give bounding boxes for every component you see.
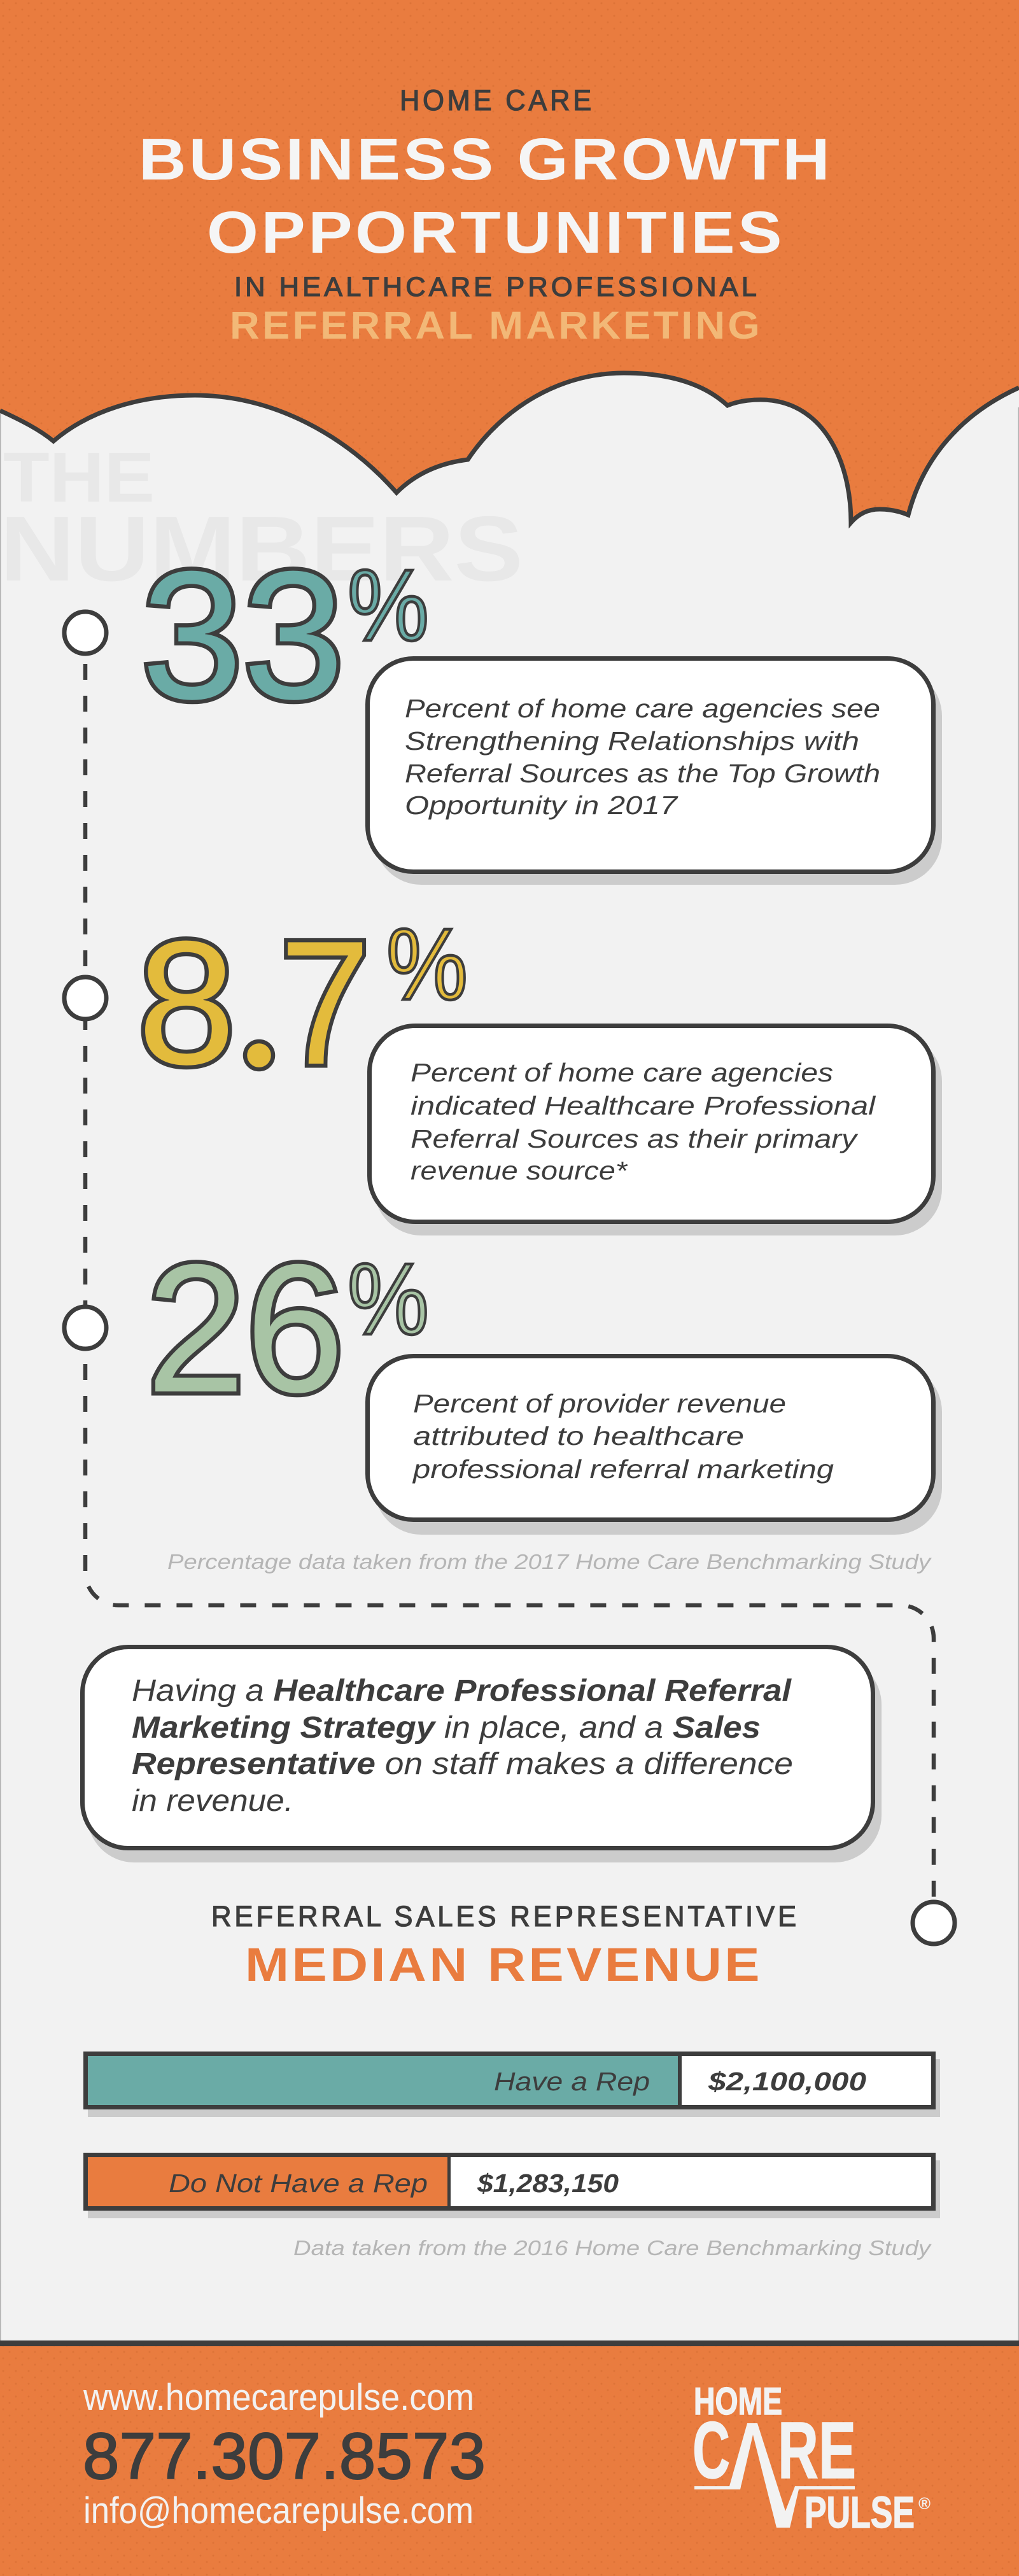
title: business growth: BUSINESS GROWTH xyxy=(139,126,833,192)
card: 33 percent description: Opportunity in 2017 xyxy=(405,791,679,820)
callout: strategy statement: Representative on staff makes a difference xyxy=(132,1747,793,1781)
footer: email: info@homecarepulse.com xyxy=(83,2490,474,2531)
logo: home care pulse: RE xyxy=(778,2405,856,2495)
watermark: the numbers xyxy=(0,439,523,600)
number 8.7: 7 xyxy=(279,904,370,1101)
title: opportunities: OPPORTUNITIES xyxy=(207,199,785,265)
callout: strategy statement xyxy=(83,1647,882,1862)
bar: have a rep xyxy=(85,2053,940,2117)
heading: median revenue: MEDIAN REVENUE xyxy=(245,1938,762,1991)
footer: website: www.homecarepulse.com xyxy=(83,2377,474,2418)
watermark: the numbers: THE xyxy=(3,439,155,517)
number 33: 33 xyxy=(141,533,344,737)
footer panel xyxy=(0,2340,1019,2576)
number 8.7 xyxy=(137,904,370,1101)
subtitle: referral marketing: REFERRAL MARKETING xyxy=(230,304,762,347)
heading: referral sales representative: REFERRAL SALES REPRESENTATIVE xyxy=(211,1900,799,1932)
logo: home care pulse: HOME xyxy=(694,2380,782,2423)
percent sign teal: % xyxy=(348,548,429,662)
timeline node 1 xyxy=(64,612,106,654)
timeline node 4 xyxy=(913,1902,955,1944)
timeline node 2 xyxy=(64,977,106,1019)
source note: revenue data: Data taken from the 2016 Home Care Benchmarking Study xyxy=(293,2236,932,2260)
footer: phone number: 877.307.8573 xyxy=(83,2419,486,2493)
header panel with cloud edge xyxy=(0,0,1019,523)
number 8.7: . xyxy=(241,947,277,1089)
watermark: the numbers: NUMBERS xyxy=(0,497,523,600)
card: 8.7 percent description: Referral Sources as their primary xyxy=(411,1124,859,1153)
bar: do not have a rep: $1,283,150 xyxy=(477,2169,619,2198)
card: 33 percent description xyxy=(368,658,942,885)
bar chart: median revenue xyxy=(85,2053,940,2218)
number 8.7: 8 xyxy=(137,904,235,1101)
card: 26 percent description: Percent of provider revenue xyxy=(413,1389,786,1418)
card: 33 percent description: Strengthening Relationships with xyxy=(405,726,859,756)
logo: home care pulse: PULSE xyxy=(805,2488,915,2537)
title: home care: HOME CARE xyxy=(400,84,594,116)
card: 8.7 percent description xyxy=(369,1026,942,1235)
card: 26 percent description: professional referral marketing xyxy=(412,1454,834,1484)
callout: strategy statement: in revenue. xyxy=(132,1784,293,1818)
bar: have a rep: $2,100,000 xyxy=(708,2067,866,2096)
callout: strategy statement: Having a Healthcare Professional Referral xyxy=(132,1674,792,1708)
bar: have a rep: Have a Rep xyxy=(494,2067,650,2096)
card: 8.7 percent description: indicated Healthcare Professional xyxy=(411,1091,876,1120)
stat 8.7 percent xyxy=(137,904,942,1235)
timeline node 3 xyxy=(64,1307,106,1349)
bar: do not have a rep xyxy=(85,2155,940,2218)
card: 33 percent description: Referral Sources as the Top Growth xyxy=(405,759,880,788)
percent sign green: % xyxy=(348,1242,429,1356)
number 26: 26 xyxy=(146,1226,344,1430)
card: 26 percent description xyxy=(368,1356,942,1535)
source note: percentage data: Percentage data taken from the 2017 Home Care Benchmarking Study xyxy=(167,1550,932,1573)
stat 26 percent xyxy=(146,1226,942,1535)
card: 8.7 percent description: Percent of home care agencies xyxy=(411,1058,833,1087)
bar: do not have a rep: Do Not Have a Rep xyxy=(169,2169,428,2198)
logo: home care pulse xyxy=(692,2380,931,2537)
stat 33 percent xyxy=(141,533,942,885)
percent sign yellow: % xyxy=(386,907,468,1021)
card: 33 percent description: Percent of home care agencies see xyxy=(405,694,880,723)
logo: home care pulse: ® xyxy=(918,2494,931,2513)
dashed timeline connector xyxy=(85,664,934,1900)
logo: home care pulse: C xyxy=(692,2405,730,2495)
card: 8.7 percent description: revenue source* xyxy=(411,1156,628,1185)
subtitle: in healthcare professional: IN HEALTHCARE PROFESSIONAL xyxy=(234,272,760,302)
card: 26 percent description: attributed to healthcare xyxy=(413,1421,744,1451)
callout: strategy statement: Marketing Strategy in place, and a Sales xyxy=(132,1711,761,1745)
